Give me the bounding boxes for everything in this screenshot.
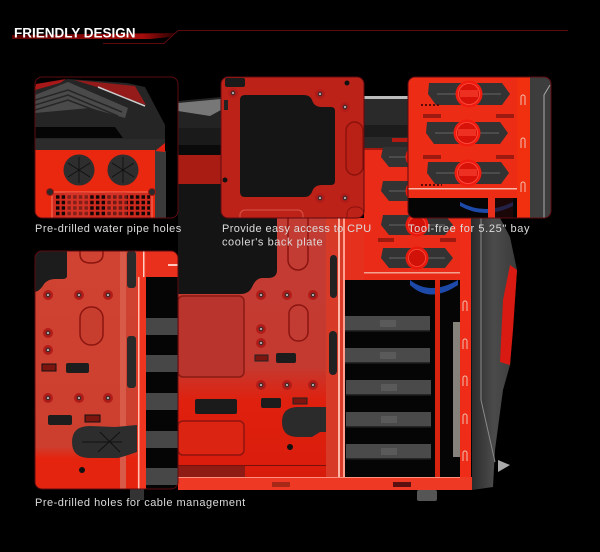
- caption: tool-free bay: Tool-free for 5.25" bay: [408, 223, 530, 235]
- bottom rail and feet: [130, 477, 472, 501]
- oval cutout: [346, 122, 363, 175]
- panel border 2: [221, 77, 364, 218]
- bay handle 1: [428, 80, 510, 108]
- panel: cable management holes: [35, 251, 178, 489]
- upper red rail: [178, 155, 221, 184]
- grommet right: [108, 154, 138, 186]
- CPU cutout: [240, 95, 335, 197]
- bay lip: [408, 188, 517, 190]
- panel border 4: [35, 251, 178, 489]
- caption: CPU access: Provide easy access to CPU: [222, 223, 372, 235]
- heading: friendly design: [12, 26, 568, 44]
- caption: water pipe holes: Pre-drilled water pipe holes: [35, 223, 182, 235]
- caption: cable management: Pre-drilled holes for cable management: [35, 497, 246, 509]
- dark front strip: [530, 77, 551, 218]
- motherboard tray: [178, 184, 338, 478]
- panel border 3: [408, 77, 551, 218]
- front panel: [460, 148, 517, 490]
- large grommet: [72, 425, 137, 458]
- computer case cutaway photo: [130, 96, 517, 501]
- lower opening: [408, 198, 517, 218]
- case top chevrons: [35, 79, 165, 151]
- red rail: [517, 77, 530, 218]
- panel: water pipe holes: [36, 79, 166, 218]
- panel: tool-free bay: [408, 77, 551, 218]
- panel: CPU back plate access: [221, 77, 364, 227]
- bay handle 2: [426, 120, 508, 146]
- red plate: [35, 150, 155, 218]
- caption: back plate: cooler's back plate: [222, 236, 323, 248]
- side strip: [155, 143, 166, 218]
- grommet left: [64, 154, 94, 186]
- panel border 1: [35, 77, 178, 218]
- drive cage: [364, 146, 460, 280]
- oval holes: [80, 251, 103, 345]
- case top shell: [178, 96, 408, 155]
- heading: friendly design: FRIENDLY DESIGN: [14, 26, 136, 40]
- black bay column: [137, 251, 178, 489]
- bay handle 3: [427, 160, 509, 186]
- vent mesh: [52, 192, 152, 219]
- column rails: [326, 218, 365, 478]
- expansion bay: [345, 280, 460, 477]
